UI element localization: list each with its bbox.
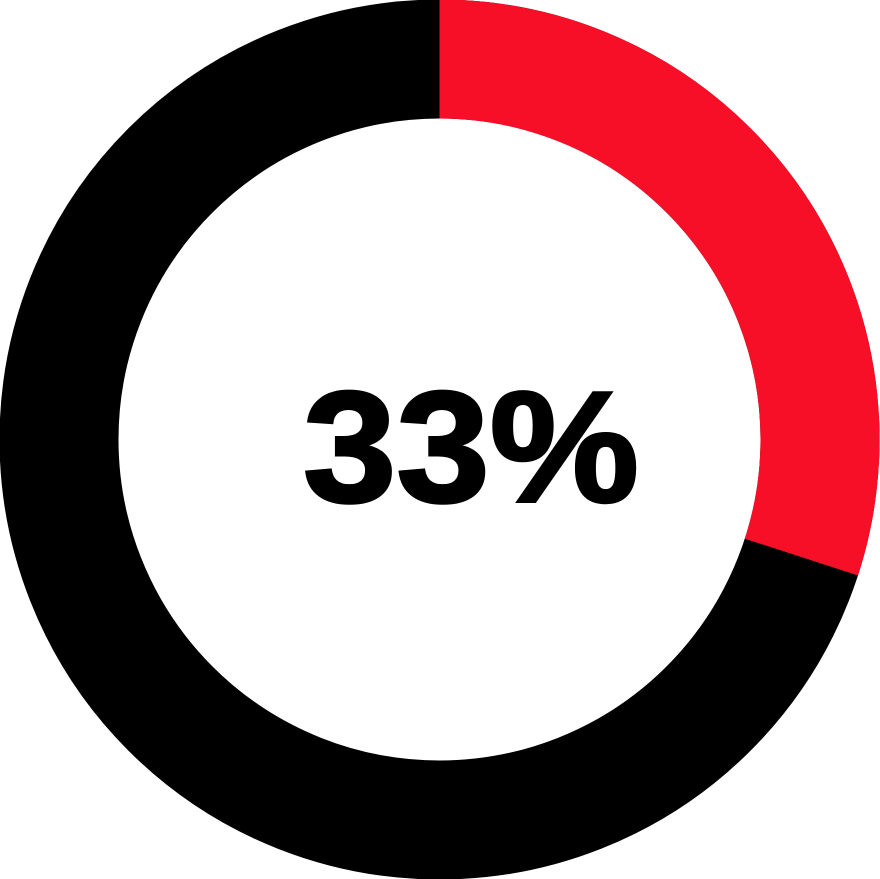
ring segment: red share bbox=[440, 0, 880, 575]
center value label: 33% bbox=[303, 360, 639, 536]
ring segment: black remainder bbox=[59, 59, 820, 820]
